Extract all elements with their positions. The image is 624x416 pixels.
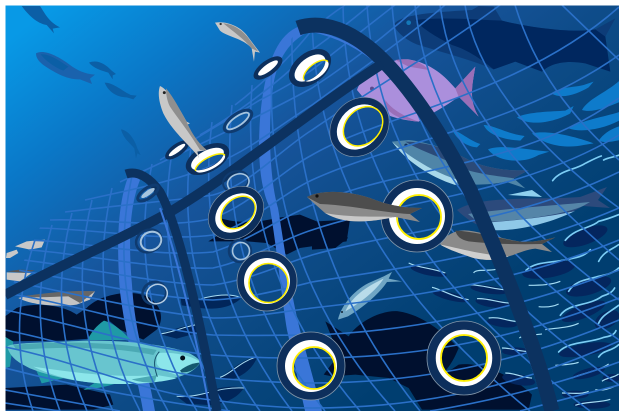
small dark fish with highlights [159, 295, 257, 405]
escape ring J [165, 140, 188, 160]
grey fish passing ring [307, 192, 422, 222]
escape ring G [186, 143, 230, 175]
escape ring I [254, 56, 282, 80]
faint ring [136, 184, 160, 202]
blue net bands [118, 26, 322, 411]
school of dark fish with white highlights [409, 215, 623, 409]
dark shadow fish: left [5, 293, 161, 410]
escape fish under net [338, 272, 402, 320]
escape ring A [277, 332, 345, 400]
grey fish under arch [440, 230, 555, 260]
navy fish with pale belly [457, 187, 610, 230]
main arch float line [298, 25, 552, 411]
faint ring [222, 170, 250, 190]
dark big fish top right [394, 6, 615, 72]
escape ring F [330, 97, 390, 157]
bright highlights far right [553, 155, 619, 181]
faint ring [222, 108, 254, 134]
escape ring D [381, 180, 453, 252]
blue fish school right [452, 80, 620, 161]
blue-grey fish under net [392, 140, 529, 188]
escape ring C [237, 251, 297, 311]
diagonal float line [5, 64, 382, 295]
silhouette fish: top left school [22, 6, 141, 159]
grey fish left pieces [6, 240, 95, 306]
faint ring [229, 240, 251, 262]
dark shadow fish: centre [208, 215, 350, 255]
pink fish [357, 59, 479, 122]
escape ring B [427, 321, 501, 395]
silver fish leaping through ring [159, 86, 207, 158]
escape ring E [208, 186, 264, 240]
faint ring [141, 280, 168, 306]
silver fish top [215, 22, 260, 62]
salmon [5, 321, 201, 390]
small arch float line [126, 173, 217, 411]
faint ring [134, 228, 163, 254]
dark shadow fish: bottom centre [312, 226, 532, 410]
escape ring H [288, 49, 331, 87]
